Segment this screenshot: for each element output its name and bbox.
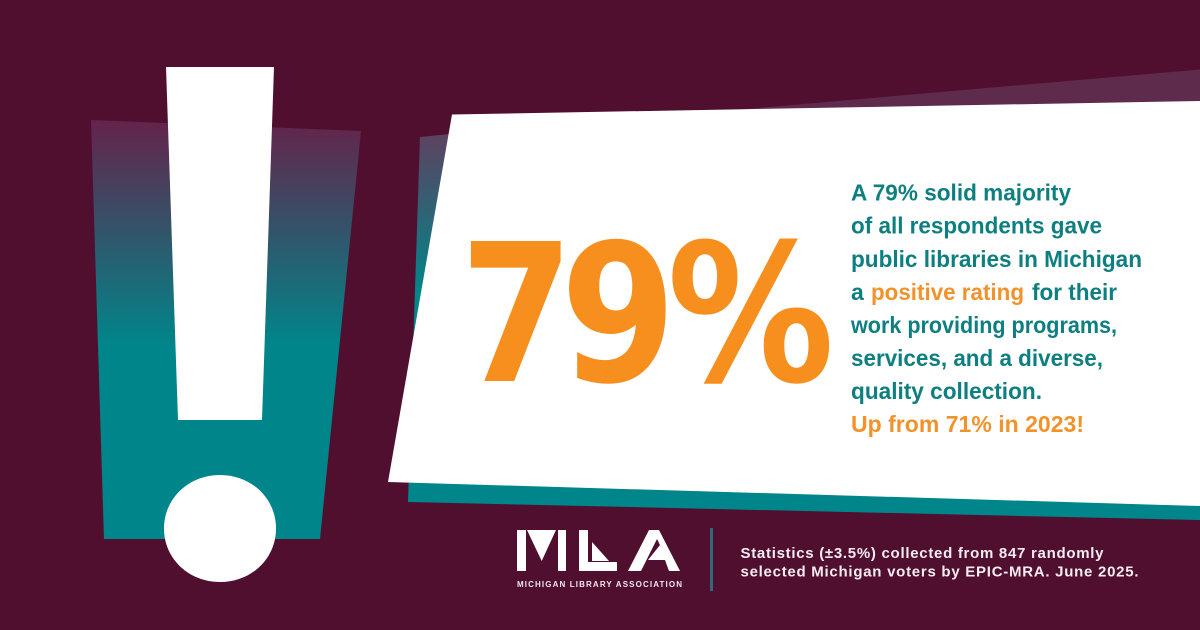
statement text: positive rating [871, 279, 1024, 305]
big number 79%: 7 [460, 204, 574, 427]
logo letter A [628, 530, 680, 571]
logo letter L [579, 530, 617, 571]
statement text [850, 180, 1142, 437]
statement text: A 79% solid majority [851, 180, 1071, 206]
big number 79%: % [667, 204, 834, 427]
statement text: work providing programs, [850, 312, 1117, 338]
teal shadow panel [408, 132, 1200, 520]
statement text: Up from 71% in 2023! [851, 411, 1084, 437]
logo letter M [517, 530, 566, 571]
source note: selected Michigan voters by EPIC-MRA. June 2025. [740, 564, 1138, 580]
vertical divider [710, 528, 713, 591]
MLA logo [517, 530, 682, 589]
white panel [388, 101, 1200, 506]
source note: Statistics (±3.5%) collected from 847 randomly [740, 545, 1104, 562]
statement text: for their [1032, 279, 1117, 305]
source note [740, 545, 1138, 580]
statement text: quality collection. [851, 378, 1042, 404]
statement text: a [851, 279, 864, 305]
logo caption: MICHIGAN LIBRARY ASSOCIATION [517, 580, 682, 589]
statement text: services, and a diverse, [851, 345, 1103, 371]
big number 79%: 9 [560, 204, 676, 427]
exclamation mark [164, 67, 276, 582]
big number 79% [460, 204, 834, 427]
statement text: of all respondents gave [851, 212, 1102, 238]
top-right translucent sliver [700, 70, 1200, 118]
exclamation backdrop [91, 120, 361, 539]
statement text: public libraries in Michigan [851, 246, 1142, 272]
